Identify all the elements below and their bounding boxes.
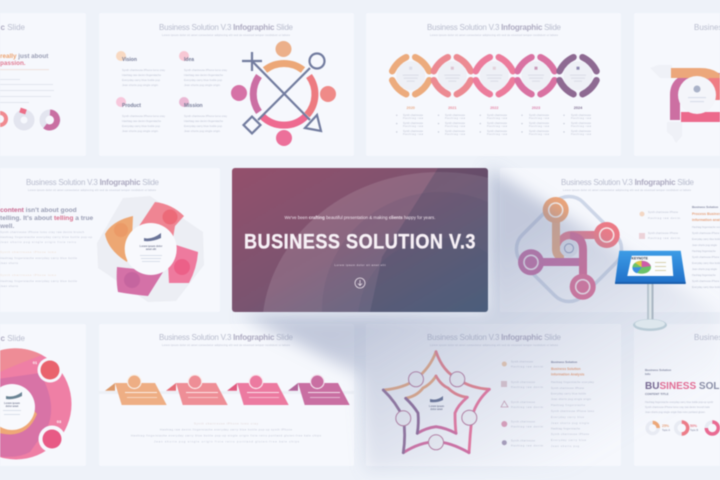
bullet lists: Hashtag raw — [571, 125, 591, 128]
text: right column: Business Solution — [692, 205, 718, 209]
heading: slide title: Business Solution V.3 Infographic Slide — [427, 333, 562, 342]
bullet lists: Synth chartreuse — [571, 122, 592, 125]
text: mission block — [184, 103, 228, 133]
list: star items: Synth chartreuse — [511, 381, 536, 384]
text: vision block: Everyday carry blue bottle pop — [122, 78, 160, 82]
chart: 2024 ring — [560, 57, 596, 94]
chart: swirl circle: Lorem ipsum — [4, 402, 21, 405]
heading: slide title: Business Solution V.3 Infographic Slide — [26, 178, 160, 187]
bullet lists: Synth chartreuse — [487, 114, 508, 117]
bullet lists: Synth chartreuse — [487, 122, 508, 125]
chart: crossed arrows ring — [231, 41, 336, 146]
chart: donut 25 percent: Topic A — [662, 429, 670, 432]
subtitle: Lorem ipsum dolor sit amet consectetur adipiscing elit sed do eiusmod tempor incididunt ut labore — [28, 189, 157, 192]
panel: ribbons slide — [99, 324, 354, 466]
text: star right column: Information Analysis — [551, 372, 585, 376]
sub caption: Lorem ipsum dolor sit amet elit — [334, 263, 386, 267]
text: content title and body: CONTENT TITLE — [645, 392, 669, 396]
text: body paragraphs: Jean shorts — [0, 284, 19, 288]
text: star right column: Everyday carry blue bottle — [551, 392, 587, 396]
text: passion statement: passion. — [0, 60, 26, 67]
panel: pie ring slide, bottom left — [0, 324, 86, 466]
ribbon 1 — [105, 375, 167, 405]
text: idea block: Idea — [184, 57, 194, 63]
bullet lists: Hashtag raw — [445, 117, 465, 120]
bullet lists: Hashtag raw — [403, 125, 423, 128]
bullet lists: Hashtag raw — [445, 125, 465, 128]
panel: branch diagram slide — [500, 168, 720, 312]
text: content title and body — [645, 392, 714, 414]
chart: swirl circle: 03 — [57, 419, 62, 424]
bullet lists: Hashtag raw — [529, 133, 549, 136]
text: right column: Hashtag fingerstache — [692, 274, 716, 277]
icon: pie chart on slide — [632, 261, 666, 274]
list: star items: Synth chartreuse — [511, 420, 536, 424]
years row — [406, 106, 583, 110]
text: mission block: Jean shorts pug single origin — [184, 129, 220, 133]
text: mission block: Hashtag raw denim fingerstache — [184, 119, 223, 123]
chart: 2020 ring — [392, 57, 429, 94]
text: star right column — [551, 360, 595, 448]
bullet lists: Hashtag raw — [445, 133, 465, 136]
text: body paragraphs: Hashtag fingerstache everyday carry blue bottle pop-up — [0, 235, 92, 239]
panel: vision idea product mission slide — [99, 13, 354, 156]
bullet lists: Hashtag raw — [487, 117, 507, 120]
text: star right column: Hashtag fingerstache — [551, 428, 581, 430]
text: content statement: content isn't about good — [0, 207, 77, 214]
text: right column: Jean shorts pug single — [692, 268, 718, 271]
text: product block: Jean shorts pug single origin — [122, 129, 158, 133]
years row: 2022 — [490, 106, 499, 110]
keynote label: KEYNOTE — [632, 256, 649, 260]
subtitle: Lorem ipsum dolor sit amet consectetur adipiscing elit sed do eiusmod tempor incididunt ut labore — [162, 34, 291, 37]
bullet lists: Hashtag raw — [571, 117, 591, 120]
panel: content title slide, bottom right — [634, 324, 720, 466]
text: content label: Business Solution — [645, 368, 671, 372]
text: vision block: Hashtag raw denim fingerstache — [122, 73, 161, 77]
chart: double star: Lorem ipsum — [429, 405, 444, 408]
subtitle: Lorem ipsum dolor sit amet consectetur adipiscing elit sed do eiusmod tempor incididunt ut labore — [563, 189, 692, 192]
text: content statement: telling. It's about telling a true — [0, 215, 93, 222]
bullet lists: Synth chartreuse — [403, 122, 424, 125]
text: idea block: Everyday carry blue bottle pop — [184, 78, 222, 82]
bullet lists: Hashtag raw — [403, 133, 423, 136]
bullet lists: Hashtag raw — [487, 133, 507, 136]
bullet lists: Synth chartreuse — [445, 130, 466, 133]
panel: ribbon ring slide, top right — [634, 13, 720, 156]
tagline: We've been crafting beautiful presentation & making clients happy for years. — [285, 215, 435, 220]
text: right column: Synth chartreuse iPhone — [692, 232, 720, 235]
list: star items: Synth chartreuse — [511, 360, 534, 364]
text: body paragraphs: Jean shorts pug single origin fixie retro — [0, 240, 76, 244]
list: star items: Synth chartreuse — [511, 440, 536, 442]
text: star right column: Synth chartreuse iPhone — [551, 433, 590, 436]
chart: cycle petals: Lorem ipsum dolor — [140, 245, 162, 248]
icon: download circle — [355, 278, 365, 288]
text: star right column: Hashtag fingerstache — [551, 404, 586, 407]
panel: vision cards slide, top left — [0, 13, 86, 156]
text: star right column: Business Solution — [551, 360, 577, 364]
bullet lists — [396, 114, 592, 136]
heading: slide title: Business Solution V.3 Infographic Slide — [159, 23, 294, 32]
text: right column — [692, 205, 720, 289]
bullet lists: Synth chartreuse — [529, 114, 550, 117]
text: content title and body: Hashtag fingerstache everyday carry blue bottle pop-up synth — [645, 401, 714, 404]
text: product block — [122, 103, 166, 133]
title: BUSINESS SOLUTION V.3 — [244, 230, 476, 254]
years row: 2021 — [448, 106, 457, 110]
text: idea block: Hashtag raw denim fingerstache — [184, 73, 223, 77]
chart: double star: dolor amet — [430, 408, 443, 411]
icon: product dot — [116, 97, 126, 107]
text: content title and body: Synth chartreuse iPhone lomo cray raw denim brunch kale — [645, 406, 710, 409]
cast shadow from hero card — [240, 168, 720, 470]
icon: idea dot — [179, 51, 189, 61]
panel: timeline slide — [366, 13, 621, 156]
list: star items: Hashtag raw denim — [511, 444, 543, 448]
text: content statement: well. — [0, 223, 14, 230]
text: idea block — [184, 57, 228, 87]
bullet lists: Hashtag raw — [529, 125, 549, 128]
text: ribbons caption: Synth chartreuse iPhone lomo cray — [194, 422, 259, 426]
text: right column: Jean shorts pug single — [692, 244, 718, 247]
icon: vision dot — [116, 51, 126, 61]
bullet lists: Synth chartreuse — [445, 122, 466, 125]
chart: donut 50 percent: Topic B — [690, 429, 699, 432]
list: star items — [501, 360, 543, 448]
list: feature items: Hashtag raw denim — [648, 217, 680, 220]
chart: branching circles diagram — [508, 188, 630, 310]
text: star right column: Business Solution — [551, 367, 581, 371]
ribbon 2 — [166, 375, 228, 405]
chart: 2023 ring — [518, 57, 554, 94]
text: product block: Product — [122, 103, 141, 109]
subtitle: Lorem ipsum dolor sit amet consectetur adipiscing elit sed do eiusmod tempor incididunt ut labore — [162, 344, 291, 347]
chart: 2022 ring — [476, 57, 513, 94]
years row: 2020 — [406, 106, 415, 110]
chart: three donuts — [0, 110, 58, 128]
bullet lists: Synth chartreuse — [487, 130, 508, 133]
bullet lists: Synth chartreuse — [403, 114, 424, 117]
text: star right column: Jean shorts pug single — [551, 422, 590, 425]
text: body paragraphs: Synth chartreuse iPhone lomo — [0, 250, 56, 254]
list: star items: Hashtag raw denim — [511, 426, 543, 428]
bullet lists: Synth chartreuse — [529, 130, 550, 133]
text: star right column: Everyday carry blue — [551, 439, 587, 442]
panel: star diagram slide — [366, 324, 621, 466]
bullet lists: Synth chartreuse — [571, 130, 592, 133]
bullet lists: Synth chartreuse — [529, 122, 550, 125]
text: right column: Synth chartreuse iPhone — [692, 256, 720, 259]
list: star items: Hashtag raw denim — [511, 406, 543, 409]
text: ribbons caption — [131, 422, 322, 444]
bullet lists: Synth chartreuse — [445, 114, 466, 117]
chart: swirl circle — [0, 348, 72, 460]
text: mission block: Everyday carry blue bottle pop — [184, 124, 222, 128]
text: passion statement: really just about — [0, 53, 48, 60]
text: product block: Synth chartreuse iPhone lomo cray — [122, 114, 166, 118]
subtitle: Lorem ipsum dolor sit amet consectetur adipiscing elit sed do eiusmod tempor incididunt ut labore — [430, 344, 559, 347]
text: vision block: Vision — [122, 57, 137, 63]
list: star items: Hashtag raw denim — [511, 366, 543, 368]
heading: slide title: Business Solution V.3 Infographic Slide — [159, 333, 294, 342]
chart: donut 75 percent — [706, 422, 718, 434]
bullet lists: Hashtag raw — [403, 117, 423, 120]
text: mission block: Mission — [184, 103, 203, 109]
list: star items: Hashtag raw denim — [511, 386, 543, 389]
text: star right column: Jean shorts pug single origin — [551, 398, 592, 401]
text: product block: Hashtag raw denim fingerstache — [122, 119, 161, 123]
bullet lists: Synth chartreuse — [403, 130, 424, 133]
text: passion body — [0, 69, 54, 103]
text: star right column: Everyday carry blue — [551, 416, 585, 419]
years row: 2023 — [532, 106, 540, 110]
text: idea block: Jean shorts pug single origin — [184, 83, 220, 87]
list: feature items: Hashtag raw denim — [648, 237, 680, 240]
heading: slide title: Business Solution V.3 Infographic Slide — [561, 178, 695, 187]
text: right column: Hashtag fingerstache — [692, 250, 716, 253]
text: star right column: Hashtag fingerstache everyday — [551, 381, 595, 384]
diagram: ribbon ring — [650, 65, 720, 143]
list: feature items: Synth chartreuse iPhone — [648, 211, 679, 214]
text: star right column: Synth chartreuse iPhone — [551, 387, 585, 390]
heading: slide title: Business Solution V.3 Infographic Slide — [427, 23, 562, 32]
chart: cycle petals — [97, 196, 204, 302]
chart: cycle petals: amet elit — [146, 248, 156, 251]
text: star right column: Jean shorts pug — [551, 445, 580, 448]
text: product block: Everyday carry blue bottle pop — [122, 124, 160, 128]
icon: keynote podium — [615, 251, 686, 331]
text: ribbons caption: Hashtag raw denim fingerstache everyday carry blue bottle pop-up synth iPhone — [160, 428, 292, 432]
text: star right column: Synth chartreuse iPhone lomo — [551, 410, 595, 413]
bullet lists: Hashtag raw — [571, 133, 591, 136]
chart: donut 50 percent — [676, 422, 699, 434]
list: star items: Synth chartreuse — [511, 401, 536, 404]
subtitle: Lorem ipsum dolor sit amet consectetur adipiscing elit sed do eiusmod tempor incididunt ut labore — [430, 34, 559, 37]
bullet lists: Synth chartreuse — [571, 114, 592, 117]
text: body paragraphs: Synth chartreuse iPhone lomo cray raw denim brunch — [0, 230, 84, 234]
icon: mission dot — [179, 97, 189, 107]
bullet lists: Hashtag raw — [529, 117, 549, 120]
text: content label: Info — [645, 372, 651, 376]
text: vision block: Synth chartreuse iPhone lomo cray — [122, 68, 166, 72]
ribbon 3 — [227, 375, 289, 405]
text: body paragraphs — [0, 230, 92, 288]
ribbon 4 — [288, 375, 350, 405]
list: feature items: Synth chartreuse iPhone — [648, 232, 679, 235]
chart: donut 50 percent: 50% — [690, 424, 698, 428]
chart: swirl circle: dolor amet — [6, 405, 19, 408]
panel: cycle diagram slide — [0, 168, 220, 312]
list: feature items — [639, 211, 680, 240]
chart: double star — [383, 352, 489, 453]
text: right column: Synth chartreuse iPhone — [692, 280, 720, 283]
text: body paragraphs: Synth chartreuse iPhone lomo — [0, 273, 56, 277]
bullet lists: Hashtag raw — [487, 125, 507, 128]
text: idea block: Synth chartreuse iPhone lomo cray — [184, 68, 228, 72]
chart: donut 25 percent — [647, 422, 670, 434]
chart: swirl circle: 01 — [33, 360, 38, 365]
chart: donut 25 percent: 25% — [662, 424, 670, 428]
chart: 2021 ring — [434, 57, 471, 94]
text: content title and body: Jean shorts pug single origin fixie retro portland gluten — [645, 411, 706, 414]
text: ribbons caption: Jean shorts pug single origin fixie retro portland gluten-free kale chips — [154, 440, 300, 444]
text: vision block — [122, 57, 166, 87]
text: vision block: Jean shorts pug single origin — [122, 83, 158, 87]
text: body paragraphs: Jean shorts — [0, 261, 19, 265]
text: body paragraphs: Hashtag fingerstache everyday carry blue bottle — [0, 279, 77, 283]
years row: 2024 — [574, 106, 583, 110]
text: body paragraphs: Hashtag fingerstache everyday carry blue bottle — [0, 256, 77, 260]
panel: hero title card — [231, 167, 489, 313]
text: ribbons caption: Hashtag fingerstache everyday carry blue bottle pop-up single origin fixie retro portland gluten-free kale chips — [131, 434, 322, 438]
text: mission block: Synth chartreuse iPhone lomo cray — [184, 114, 228, 118]
